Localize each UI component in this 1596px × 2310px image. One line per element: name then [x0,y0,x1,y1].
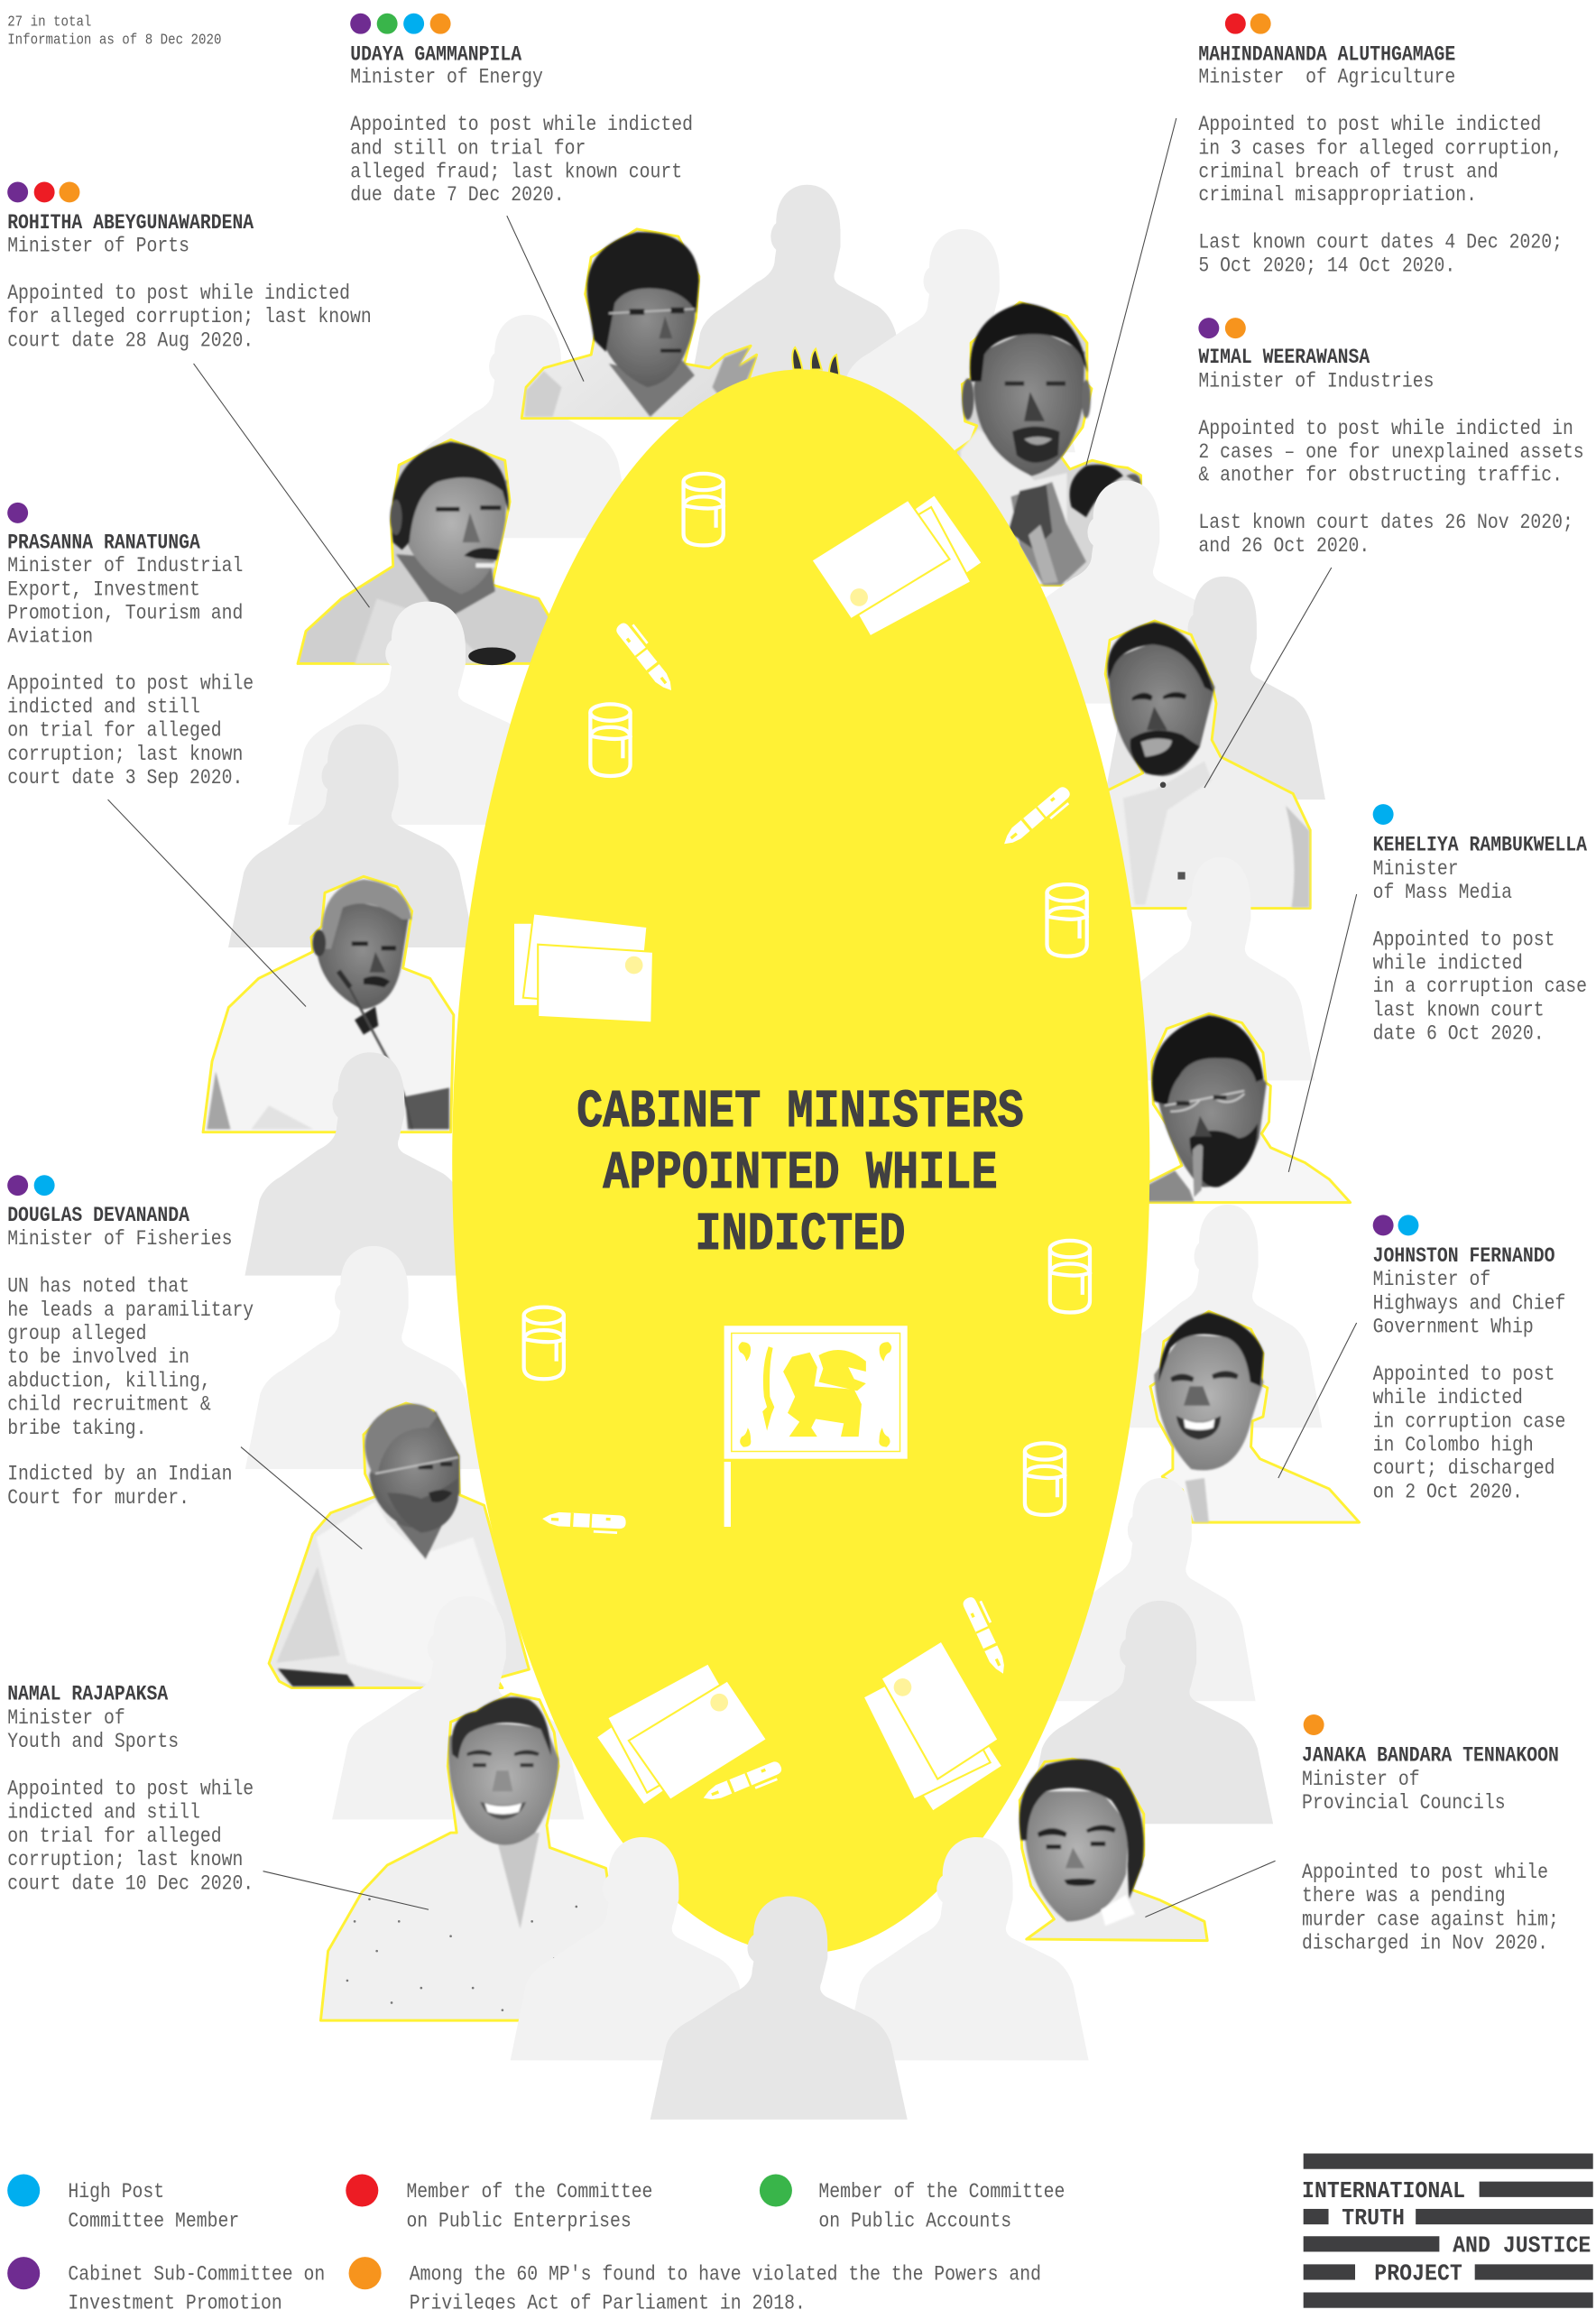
photo: Douglas Devananda [269,1403,529,1688]
panel: Udaya Gammanpila: Appointed to post while indicted [350,114,693,137]
silhouette: over Aluthgamage photo [1000,480,1232,704]
legend item: privileges act: Among the 60 MP's found to have violated the the Powers and [410,2263,1041,2287]
panel: Udaya Gammanpila: Minister of Energy [350,67,543,89]
panel: Douglas Devananda: Indicted by an Indian [7,1463,232,1486]
panel: Janaka Bandara Tennakoon: Appointed to post while [1302,1862,1548,1885]
panel: Mahindananda Aluthgamage [1198,14,1563,278]
panel: Rohitha Abeygunawardena: ROHITHA ABEYGUNAWARDENA [7,212,254,236]
panel: Johnston Fernando: while indicted [1373,1387,1523,1410]
panel: Mahindananda Aluthgamage: Appointed to post while indicted [1198,114,1541,137]
panel: Prasanna Ranatunga [7,503,254,790]
panel: Keheliya Rambukwella: of Mass Media [1373,882,1512,905]
icon: water glass 3 [1047,884,1087,956]
legend item: high post [7,2174,239,2233]
panel: Udaya Gammanpila: alleged fraud; last known court [350,161,682,184]
silhouette: right upper [1104,577,1325,799]
silhouette: right bottom over Fernando [1050,1478,1256,1701]
photo: Johnston Fernando [1150,1311,1360,1522]
panel: Wimal Weerawansa [1198,318,1584,558]
panel: Janaka Bandara Tennakoon: discharged in Nov 2020. [1302,1932,1548,1955]
title: INDICTED [695,1206,906,1266]
panel: Prasanna Ranatunga: Minister of Industrial [7,555,243,578]
panel: Namal Rajapaksa: NAMAL RAJAPAKSA [7,1683,168,1706]
photo: Wimal Weerawansa [1105,621,1310,909]
panel: Prasanna Ranatunga: Aviation [7,626,93,649]
note: total and date: Information as of 8 Dec 2020 [7,31,221,49]
photo: Janaka Bandara Tennakoon [1019,1759,1207,1941]
silhouette: front right [844,1837,1089,2060]
icon: pen 1 [614,617,680,695]
panel: Johnston Fernando [1373,1215,1565,1504]
panel: Johnston Fernando: in corruption case [1373,1410,1565,1434]
icon: pen 3 [542,1511,626,1535]
silhouette: top centre [687,185,909,408]
logo: International Truth and Justice Project: INTERNATIONAL [1302,2179,1465,2204]
photo: Udaya Gammanpila [521,229,839,419]
legend item: public accounts: on Public Accounts [818,2210,1011,2233]
panel: Johnston Fernando: Appointed to post [1373,1363,1554,1387]
panel: Udaya Gammanpila [350,14,693,207]
panel: Namal Rajapaksa: court date 10 Dec 2020. [7,1872,254,1896]
panel: Keheliya Rambukwella: KEHELIYA RAMBUKWELLA [1373,834,1587,857]
panel: Keheliya Rambukwella: while indicted [1373,952,1523,975]
panel: Mahindananda Aluthgamage: MAHINDANANDA ALUTHGAMAGE [1198,43,1455,67]
silhouette: over Ranatunga chest [244,1052,476,1276]
panel: Keheliya Rambukwella: in a corruption case [1373,975,1587,999]
panel: Janaka Bandara Tennakoon: there was a pending [1302,1885,1506,1908]
silhouette: right lower [1116,1205,1322,1428]
silhouette: over Abeygunawardena photo [288,602,545,825]
leader lines [108,118,1357,1917]
panel: Johnston Fernando: Government Whip [1373,1316,1534,1339]
panel: Udaya Gammanpila: due date 7 Dec 2020. [350,184,565,207]
legend item: high post: Committee Member [68,2210,239,2233]
panel: Rohitha Abeygunawardena: Minister of Ports [7,235,189,258]
icons on the table [514,474,1090,1818]
logo: International Truth and Justice Project [1302,2154,1593,2308]
panel: Johnston Fernando: on 2 Oct 2020. [1373,1481,1523,1504]
silhouette: top right [831,229,1075,452]
panel: Janaka Bandara Tennakoon [1302,1714,1559,1955]
panel: Rohitha Abeygunawardena: for alleged corruption; last known [7,306,372,329]
panel: Johnston Fernando: Highways and Chief [1373,1292,1565,1316]
panel: Douglas Devananda: abduction, killing, [7,1370,211,1393]
panel: Johnston Fernando: in Colombo high [1373,1434,1534,1457]
panel: Douglas Devananda: Minister of Fisheries [7,1228,232,1252]
logo: International Truth and Justice Project: PROJECT [1374,2262,1462,2287]
photo: Namal Rajapaksa [320,1694,628,2020]
panel: Mahindananda Aluthgamage: in 3 cases for alleged corruption, [1198,137,1563,161]
panel: Mahindananda Aluthgamage: criminal misappropriation. [1198,184,1477,207]
icon: papers 1 [810,482,987,651]
silhouette: front left [511,1837,754,2060]
panel: Keheliya Rambukwella: Minister [1373,858,1459,881]
photo: Mahindananda Aluthgamage [946,302,1141,586]
legend item: public accounts [760,2174,1065,2233]
silhouette: left lower [245,1246,482,1469]
legend item: high post: High Post [68,2181,164,2204]
logo: International Truth and Justice Project: TRUTH [1342,2206,1405,2232]
panel: Keheliya Rambukwella [1373,804,1587,1046]
panel: Namal Rajapaksa: on trial for alleged [7,1825,222,1848]
title [577,1083,1024,1266]
silhouette: upper left [401,315,633,538]
panel: Prasanna Ranatunga: court date 3 Sep 2020. [7,767,243,790]
panel: Douglas Devananda: group alleged [7,1323,146,1346]
panel: Prasanna Ranatunga: PRASANNA RANATUNGA [7,531,200,555]
panel: Keheliya Rambukwella: Appointed to post [1373,929,1554,952]
icon: pen 2 [1000,785,1075,853]
panel: Keheliya Rambukwella: last known court [1373,999,1545,1022]
photo: Rohitha Abeygunawardena [298,439,549,665]
panel: Namal Rajapaksa [7,1683,254,1896]
icon: papers 2 [514,913,653,1022]
panel: Namal Rajapaksa: Minister of [7,1707,125,1730]
icon: pen 4 [961,1594,1013,1677]
silhouette: left middle [228,725,475,947]
icon: water glass 5 [524,1307,564,1379]
panel: Johnston Fernando: JOHNSTON FERNANDO [1373,1245,1555,1269]
legend item: investment promotion [7,2257,325,2310]
silhouette: right middle [1109,857,1315,1080]
note: total and date [7,14,221,49]
panel: Namal Rajapaksa: corruption; last known [7,1849,243,1872]
panel: Prasanna Ranatunga: Promotion, Tourism and [7,602,243,625]
legend item: public enterprises: Member of the Committee [406,2181,652,2204]
table: yellow ellipse [452,370,1149,1954]
panel: Wimal Weerawansa: Appointed to post while indicted in [1198,418,1573,440]
silhouette: left bottom over Devananda [332,1596,584,1819]
panel: Wimal Weerawansa: Minister of Industries [1198,370,1435,393]
panel: Mahindananda Aluthgamage: Last known court dates 4 Dec 2020; [1198,231,1563,254]
panel: Douglas Devananda: DOUGLAS DEVANANDA [7,1205,189,1227]
panel: Keheliya Rambukwella: date 6 Oct 2020. [1373,1022,1545,1046]
panel: Janaka Bandara Tennakoon: Provincial Councils [1302,1792,1506,1816]
panel: Douglas Devananda: UN has noted that [7,1275,189,1298]
panel: Douglas Devananda: bribe taking. [7,1418,146,1440]
panel: Rohitha Abeygunawardena: court date 28 Aug 2020. [7,329,254,353]
panel: Wimal Weerawansa: 2 cases – one for unexplained assets [1198,441,1584,464]
legend item: public accounts: Member of the Committee [818,2181,1065,2204]
icon: water glass 2 [590,704,631,776]
legend item: public enterprises [346,2174,652,2233]
panel: Rohitha Abeygunawardena [7,181,372,353]
silhouette: right bottom dark [1027,1601,1273,1824]
panel: Johnston Fernando: court; discharged [1373,1457,1554,1481]
panel: Douglas Devananda: to be involved in [7,1346,189,1370]
legend [7,2174,1065,2310]
panel: Wimal Weerawansa: & another for obstructing traffic. [1198,464,1563,487]
legend item: privileges act [349,2257,1041,2310]
panel: Douglas Devananda: child recruitment & [7,1393,211,1417]
panel: Wimal Weerawansa: and 26 Oct 2020. [1198,535,1370,558]
panel: Mahindananda Aluthgamage: criminal breach of trust and [1198,161,1499,184]
icon: Sri Lanka flag [724,1326,908,1527]
panel: Udaya Gammanpila: and still on trial for [350,137,586,161]
note: total and date: 27 in total [7,14,91,31]
icon: pen 5 [701,1760,785,1808]
panel: Mahindananda Aluthgamage: 5 Oct 2020; 14 Oct 2020. [1198,254,1455,278]
panel: Udaya Gammanpila: UDAYA GAMMANPILA [350,43,521,67]
legend item: public enterprises: on Public Enterprises [406,2210,632,2233]
title: CABINET MINISTERS [577,1083,1024,1143]
legend item: investment promotion: Cabinet Sub-Committee on [68,2263,325,2287]
panel: Namal Rajapaksa: indicted and still [7,1802,200,1825]
silhouette: front centre [650,1897,908,2120]
title: APPOINTED WHILE [603,1144,998,1205]
icon: water glass 6 [1025,1443,1065,1515]
panel: Douglas Devananda: Court for murder. [7,1487,189,1510]
panel: Prasanna Ranatunga: on trial for alleged [7,720,222,743]
panel: Douglas Devananda: he leads a paramilitary [7,1299,254,1322]
panel: Prasanna Ranatunga: indicted and still [7,696,200,719]
panel: Prasanna Ranatunga: Appointed to post while [7,672,254,696]
panel: Johnston Fernando: Minister of [1373,1269,1490,1292]
icon: papers 3 [592,1649,768,1818]
panel: Prasanna Ranatunga: Export, Investment [7,578,200,602]
panel: Rohitha Abeygunawardena: Appointed to post while indicted [7,282,350,305]
panel: Mahindananda Aluthgamage: Minister of Agriculture [1198,67,1455,89]
icon: water glass 4 [1050,1241,1090,1313]
photo: Keheliya Rambukwella [1146,1013,1351,1203]
panel: Janaka Bandara Tennakoon: JANAKA BANDARA TENNAKOON [1302,1744,1559,1768]
icon: water glass 1 [684,474,724,545]
icon: papers 4 [849,1640,1016,1816]
panel: Namal Rajapaksa: Youth and Sports [7,1731,179,1754]
panel: Janaka Bandara Tennakoon: Minister of [1302,1769,1420,1791]
panel: Namal Rajapaksa: Appointed to post while [7,1778,254,1801]
panel: Douglas Devananda [7,1175,254,1510]
logo: International Truth and Justice Project: AND JUSTICE [1453,2233,1591,2259]
panel: Janaka Bandara Tennakoon: murder case against him; [1302,1908,1559,1932]
panel: Wimal Weerawansa: WIMAL WEERAWANSA [1198,346,1370,370]
photo: Prasanna Ranatunga [203,876,454,1132]
panel: Prasanna Ranatunga: corruption; last known [7,744,243,766]
panel: Wimal Weerawansa: Last known court dates 26 Nov 2020; [1198,512,1573,534]
